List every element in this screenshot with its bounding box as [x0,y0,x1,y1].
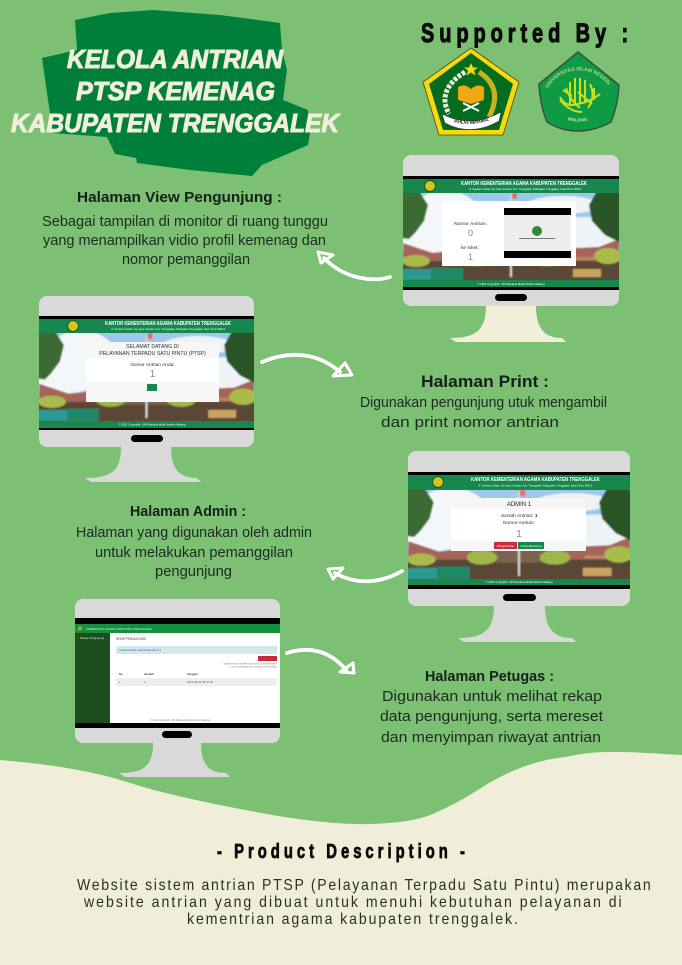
screen: admin page: ADMIN 1 [507,502,532,508]
screen: view page: 0 [468,228,473,238]
screen: petugas page: © 2021 Copyright: UIN Maulana Malik Ibrahim Malang [150,719,211,722]
cream wave [0,752,682,965]
screen: print page: 1 [150,369,156,380]
screen: petugas page: Tanggal [187,672,198,676]
screen: print page: Nomor Antrian Anda: [130,362,175,368]
text: halaman view pengunjung [42,189,328,268]
heading: supported by: Supported By : [421,18,628,49]
monitor stand [450,306,566,342]
title: KABUPATEN TRENGGALEK [11,110,341,138]
text: halaman view pengunjung: Sebagai tampilan di monitor di ruang tunggu [42,214,328,230]
text: halaman print: Digunakan pengunjung utuk mengambil [360,395,607,411]
screen: admin page: Jl. Soekarno Hatta, Gg. Apel, Kelutan, Kec. Trenggalek, Kabupaten Trenggalek, Jawa Timur 66313 [478,484,592,488]
screen: admin page: Jumlah Antrian: 1 [500,513,538,519]
text: product description: website antrian yang dibuat untuk menuhi kebutuhan pelayanan di [83,893,622,911]
screen: petugas page: Antrian berakhir, total antrian hari ini 2 [119,648,162,652]
text: product description: Website sistem antrian PTSP (Pelayanan Terpadu Satu Pintu) merupakan [77,876,651,894]
screen: print page: SELAMAT DATANG DI [126,344,179,350]
text: halaman print: Halaman Print : [421,372,549,391]
text: halaman view pengunjung: nomor pemanggilan [122,252,250,268]
screen: print page [19,319,260,428]
monitor stand [458,606,576,642]
screen: petugas page: REKAP PENGUNJUNG [116,637,146,641]
text: halaman admin: Halaman Admin : [130,503,246,520]
text: product description: kementrian agama kabupaten trenggalek. [187,910,518,928]
text: halaman print [360,372,607,431]
screen: print page: Jl. Soekarno Hatta, Gg. Apel, Kelutan, Kec. Trenggalek, Kabupaten Trenggalek, Jawa Timur 66313 [111,327,225,331]
icon: uin malang logo [538,51,620,132]
monitor: view pengunjung [383,155,625,342]
monitor button [503,594,536,601]
text: halaman petugas: dan menyimpan riwayat antrian [381,730,601,746]
text: halaman print: dan print nomor antrian [381,415,559,431]
screen: admin page: © 2021 Copyright: UIN Maulana Malik Ibrahim Malang [485,580,553,584]
screen: petugas page: Apabila antrian berakhir dan selesai, antrian berakhir [223,662,277,666]
screen: print page: © 2021 Copyright: UIN Maulana Malik Ibrahim Malang [118,422,186,426]
text: halaman petugas: Halaman Petugas : [425,668,554,685]
screen: admin page: Antrian Berikutnya [520,544,542,548]
text: halaman petugas: data pengunjung, serta mereset [380,709,603,725]
monitor button [495,294,527,301]
text: halaman admin: Halaman yang digunakan oleh admin [76,525,312,541]
screen: petugas page: KEMENTRIAN AGAMA KABUPATEN TRENGGALEK [86,627,152,631]
screen: admin page: 1 [516,529,522,540]
title [11,46,341,138]
arrow: to petugas text [287,650,354,673]
monitor stand [85,447,201,482]
screen: petugas page: 2021-06-10 09:07:26 [187,680,213,684]
screen: print page: KANTOR KEMENTERIAN AGAMA KABUPATEN TRENGGALEK [105,321,231,327]
text: halaman admin: pengunjung [155,564,232,580]
screen: petugas page: 2 [144,680,146,684]
screen: view page: Nomor Antrian: [454,221,487,227]
text: halaman view pengunjung: Halaman View Pengunjung : [77,189,282,206]
screen: admin page: Panggil Antrian [497,544,515,548]
screen: petugas page [75,624,280,723]
screen: view page: © 2021 Copyright: UIN Maulana Malik Ibrahim Malang [477,282,545,286]
monitor stand [119,743,230,777]
screen: print page: PELAYANAN TERPADU SATU PINTU (PTSP) [99,351,206,357]
text: halaman view pengunjung: yang menampilkan vidio profil kemenag dan [43,233,326,249]
screen: admin page [387,475,636,585]
arrow: to admin text [328,568,402,581]
icon: kemenag logo [422,48,520,136]
text: halaman admin [76,503,312,580]
monitor body [75,599,280,743]
arrow: to print text [262,355,352,376]
screen: view page: KANTOR KEMENTERIAN AGAMA KABUPATEN TRENGGALEK [461,181,587,187]
monitor button [162,731,192,738]
screen: petugas page: untuk menyimpan dan mereset nomor antrian [231,666,278,668]
screen: view page: ke loket: [461,245,479,251]
monitor: petugas [75,599,280,777]
text: halaman admin: untuk melakukan pemanggilan [95,545,293,561]
heading: product description: - Product Description - [217,840,465,863]
screen: petugas page: 1 [119,680,121,684]
screen: view page: Jl. Soekarno Hatta, Gg. Apel, Kelutan, Kec. Trenggalek, Kabupaten Trenggalek, Jawa Timur 66313 [469,187,581,191]
screen: petugas page: Rekap Pengunjung [80,636,104,640]
arrow: to view text [318,252,390,279]
screen: admin page: Nomor Antrian: [503,520,535,526]
monitor body [39,296,254,447]
title: PTSP KEMENAG [76,78,275,106]
icon: uin malang logo: MALANG [568,117,588,122]
monitor body [408,451,630,606]
title brush blob [42,10,310,176]
monitor: print [19,296,260,482]
icon: kemenag logo: IKHLAS BERAMAL [454,118,490,124]
screen: petugas page: Jumlah [144,672,154,676]
monitor: admin [387,451,636,642]
screen: admin page: KANTOR KEMENTERIAN AGAMA KABUPATEN TRENGGALEK [471,477,600,483]
text: halaman petugas: Digunakan untuk melihat rekap [382,689,602,705]
icon: uin malang logo: UNIVERSITAS ISLAM NEGERI [545,66,610,88]
text: product description [77,876,651,928]
screen: petugas page: No [119,672,123,676]
title: KELOLA ANTRIAN [67,46,284,74]
text: halaman petugas [380,668,603,746]
screen: view page [383,179,625,287]
monitor body [403,155,619,306]
monitor button [131,435,163,442]
screen: view page: 1 [468,252,473,262]
